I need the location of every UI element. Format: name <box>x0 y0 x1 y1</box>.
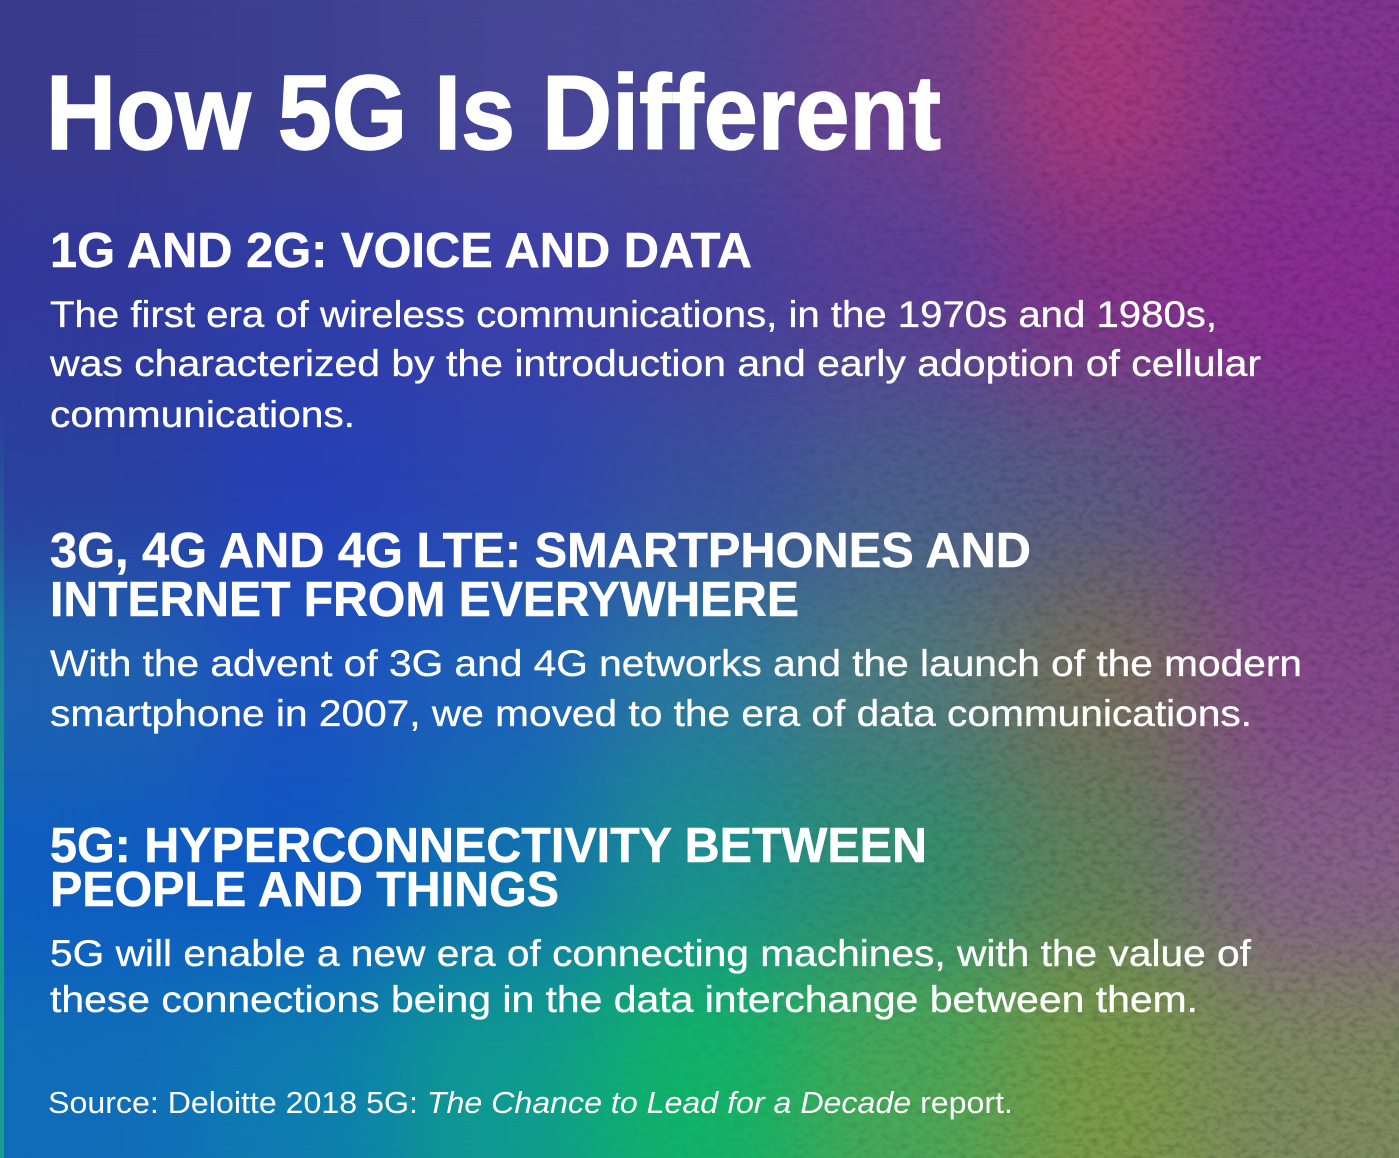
body: 1G and 2G: was characterized by the introduction and early adoption of cellular <box>49 342 1261 384</box>
body: 1G and 2G: The first era of wireless communications, in the 1970s and 1980s, <box>50 293 1217 335</box>
heading: 3G and 4G: 3G, 4G AND 4G LTE: SMARTPHONES AND <box>50 524 1031 578</box>
heading: 5G: 5G: HYPERCONNECTIVITY BETWEEN <box>50 819 927 873</box>
section: 3G and 4G <box>50 524 1302 734</box>
body: 3G and 4G: With the advent of 3G and 4G networks and the launch of the modern <box>50 642 1302 684</box>
heading: 3G and 4G <box>50 524 1031 627</box>
body: 5G: 5G will enable a new era of connecting machines, with the value of <box>50 932 1252 974</box>
heading: 5G <box>50 819 927 917</box>
heading: 1G and 2G: 1G AND 2G: VOICE AND DATA <box>50 224 752 278</box>
body: 5G <box>50 932 1252 1020</box>
body: 3G and 4G <box>50 642 1302 734</box>
body: 5G: these connections being in the data interchange between them. <box>50 978 1198 1020</box>
title: How 5G Is Different <box>46 54 941 172</box>
source note: Source: Deloitte 2018 5G: The Chance to Lead for a Decade report. <box>48 1085 1013 1120</box>
body: 3G and 4G: smartphone in 2007, we moved to the era of data communications. <box>50 692 1252 734</box>
body: 1G and 2G <box>49 293 1261 435</box>
section: 1G and 2G <box>49 224 1261 435</box>
heading: 3G and 4G: INTERNET FROM EVERYWHERE <box>50 573 799 627</box>
section: 5G <box>50 819 1252 1020</box>
body: 1G and 2G: communications. <box>50 393 355 435</box>
heading: 5G: PEOPLE AND THINGS <box>50 863 559 917</box>
